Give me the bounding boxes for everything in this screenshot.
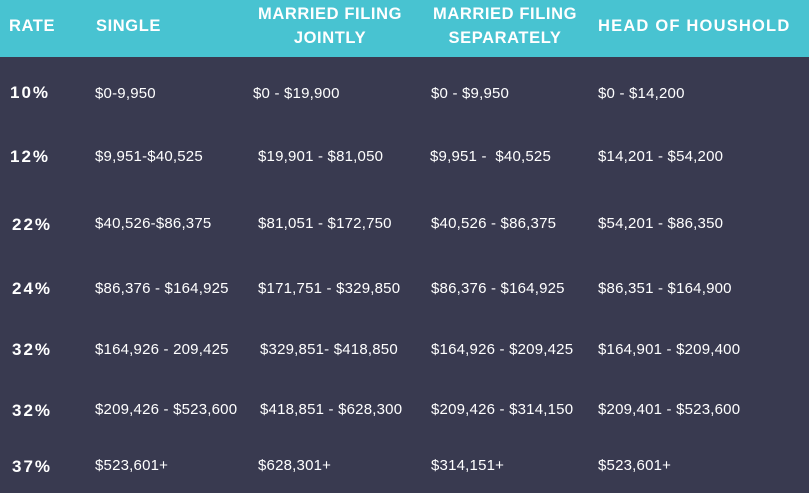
table rows: $523,601+ — [95, 457, 168, 474]
table rows: $209,426 - $314,150 — [431, 401, 573, 418]
table rows: $14,201 - $54,200 — [598, 148, 723, 165]
table rows: $164,926 - 209,425 — [95, 341, 229, 358]
table rows: $86,376 - $164,925 — [431, 280, 565, 297]
header: single: SINGLE — [96, 17, 161, 35]
row 22%: 22% — [12, 215, 52, 234]
header bar — [0, 0, 809, 57]
table rows: $314,151+ — [431, 457, 504, 474]
table rows: $40,526 - $86,375 — [431, 215, 556, 232]
table rows: $164,901 - $209,400 — [598, 341, 740, 358]
table rows: $9,951 - $40,525 — [430, 148, 551, 165]
header: head of household: HEAD OF HOUSHOLD — [598, 17, 790, 35]
table rows: $523,601+ — [598, 457, 671, 474]
header: married filing jointly: MARRIED FILING — [258, 5, 402, 23]
table rows: $164,926 - $209,425 — [431, 341, 573, 358]
header: married filing jointly: JOINTLY — [294, 29, 366, 47]
table rows: $9,951-$40,525 — [95, 148, 203, 165]
header: married filing separately: MARRIED FILING — [433, 5, 577, 23]
header: married filing separately — [433, 5, 577, 47]
table rows: $209,401 - $523,600 — [598, 401, 740, 418]
table rows: $86,351 - $164,900 — [598, 280, 732, 297]
row 32% second: 32% — [12, 401, 52, 420]
table rows: $40,526-$86,375 — [95, 215, 211, 232]
row 37%: 37% — [12, 457, 52, 476]
table rows: $0 - $14,200 — [598, 85, 685, 102]
table rows: $418,851 - $628,300 — [260, 401, 402, 418]
row 32%: 32% — [12, 340, 52, 359]
header: married filing jointly — [258, 5, 402, 47]
table rows: $0-9,950 — [95, 85, 156, 102]
table rows: $86,376 - $164,925 — [95, 280, 229, 297]
table rows: $329,851- $418,850 — [260, 341, 398, 358]
row 10%: 10% — [10, 83, 50, 102]
table rows: $0 - $9,950 — [431, 85, 509, 102]
table rows: $628,301+ — [258, 457, 331, 474]
table rows: $54,201 - $86,350 — [598, 215, 723, 232]
row 24%: 24% — [12, 279, 52, 298]
table rows: $81,051 - $172,750 — [258, 215, 392, 232]
row 12%: 12% — [10, 147, 50, 166]
table rows: $19,901 - $81,050 — [258, 148, 383, 165]
table rows: $0 - $19,900 — [253, 85, 340, 102]
header: married filing separately: SEPARATELY — [449, 29, 561, 47]
header: rate: RATE — [9, 17, 55, 35]
table rows: $209,426 - $523,600 — [95, 401, 237, 418]
table rows: $171,751 - $329,850 — [258, 280, 400, 297]
